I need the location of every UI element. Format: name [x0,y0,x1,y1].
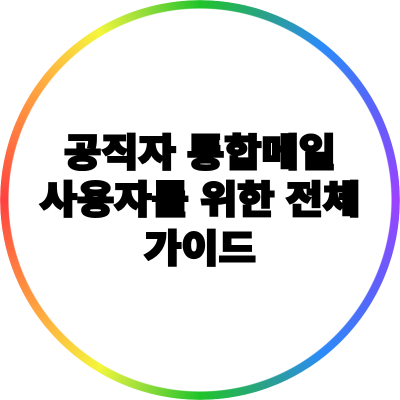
title [38,131,360,271]
title line 2: 사용자를 위한 전체 [40,178,360,222]
title line 1: 공직자 통합메일 [64,131,336,175]
title line 3: 가이드 [144,227,256,271]
